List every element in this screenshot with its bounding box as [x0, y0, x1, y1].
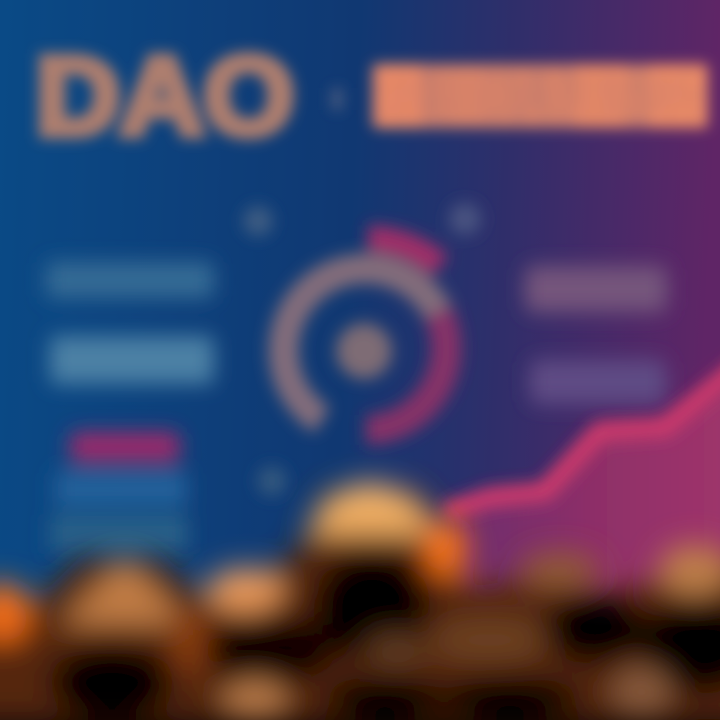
head: shoulder glow	[207, 568, 283, 612]
head: right	[520, 544, 720, 718]
ring: grey arc	[284, 269, 438, 420]
area chart	[445, 365, 720, 640]
crowd base	[0, 490, 720, 720]
left lower block two	[50, 514, 188, 554]
central ring diagram	[243, 203, 481, 496]
node top right	[449, 203, 481, 235]
left lower block one	[55, 472, 187, 506]
left label one	[46, 262, 214, 298]
title separator	[331, 88, 343, 110]
head: far left glow	[0, 582, 30, 642]
left red label	[70, 432, 180, 462]
node top left	[243, 206, 273, 236]
title word: DAO: DAO	[36, 35, 294, 158]
node bottom left	[257, 466, 287, 496]
head: left	[50, 555, 205, 720]
right text blocks	[525, 266, 667, 404]
audience silhouettes	[0, 482, 720, 720]
head: lower centre	[223, 618, 580, 720]
right label one	[525, 266, 667, 312]
left text blocks	[46, 262, 214, 554]
chart fill	[450, 370, 720, 640]
head: centre	[205, 482, 467, 685]
ring: crimson arc	[366, 312, 446, 430]
chart line	[445, 365, 720, 512]
title subtitle: 治理机制解析	[376, 66, 704, 131]
ring: inner circle	[336, 323, 392, 379]
left label two	[50, 336, 214, 384]
right label two	[530, 360, 666, 404]
ring: top crimson tick	[368, 238, 440, 266]
crowd floor	[0, 620, 720, 720]
title	[36, 35, 708, 158]
